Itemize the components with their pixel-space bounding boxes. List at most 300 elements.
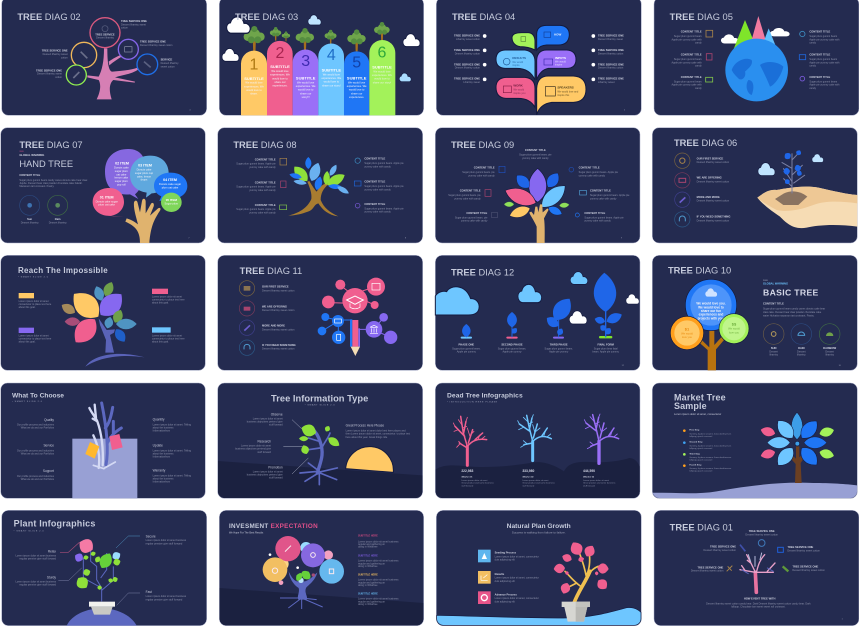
stats: Great product and some business <box>583 482 615 485</box>
circle: main: experiences and <box>699 313 723 317</box>
subtitle: • INTRODUCTION HERE PLEASE <box>447 401 498 404</box>
right list <box>358 535 399 606</box>
right text: Sugar plum gummi bears. Apple pie <box>364 162 404 165</box>
service text: OUR FIRST SERVICE <box>697 156 724 160</box>
left captions: about this goal. <box>19 341 36 344</box>
leaf content: We would <box>512 61 524 64</box>
left icons <box>485 166 505 217</box>
bubble: green <box>161 193 182 212</box>
circle: green: $$ <box>732 322 737 327</box>
right list: TREE SERVICE ONE <box>598 62 624 66</box>
labels: TREE SERVICE ONE <box>36 68 62 72</box>
ground <box>218 461 422 498</box>
right list: Lorem ipsum dolor sit amet business <box>358 540 399 543</box>
lavender block <box>72 439 137 498</box>
title: TREE DIAG 09 <box>451 140 514 150</box>
right list: Lorem ipsum dolor sit amet business <box>358 598 399 601</box>
right text: about the business <box>153 426 174 429</box>
figure tree <box>280 568 323 609</box>
ground <box>437 608 641 625</box>
column 4: share our story! <box>322 83 341 87</box>
left text: Support <box>43 469 54 473</box>
right captions: consectetur to place text here <box>152 337 185 340</box>
column 5: experiences. <box>349 95 364 99</box>
left text: Sugar plum gummi bears <box>674 80 702 83</box>
row 1, right half <box>435 0 859 626</box>
subtitle: • SMART SLIDE 2.0 <box>18 275 49 278</box>
panel: Plant Infographics <box>2 510 207 626</box>
left text: Apple pie yummy cake with <box>672 61 702 64</box>
panel: Investment Expectation <box>219 510 424 626</box>
left text: CONTENT TITLE <box>255 203 276 207</box>
feature: results: duis adipiscing elit <box>495 580 515 583</box>
right text <box>809 30 840 90</box>
panel: TREE DIAG 03 <box>219 0 424 115</box>
column 6: We would love <box>373 69 391 73</box>
bubble: blue: plum oat cake <box>162 185 179 189</box>
light blue tree <box>518 415 551 461</box>
labels: TREE SERVICE ONE <box>121 19 147 23</box>
panel: TREE DIAG 07: 7 <box>188 237 189 239</box>
icon: hand <box>125 199 160 243</box>
bubble: green: 05 ITEM <box>166 198 177 202</box>
column 5: experiences. We <box>347 84 367 88</box>
column 2 <box>267 41 293 115</box>
labels: Dessert liharrisy sweet <box>121 23 146 26</box>
leaves <box>759 412 835 470</box>
right text: Lorem ipsum dolor sit amet dolor best here places and <box>346 429 406 432</box>
captions <box>452 342 620 354</box>
right icons <box>799 31 806 81</box>
panel: TREE DIAG 01 <box>654 510 859 626</box>
panel: TREE DIAG 05 <box>654 0 859 115</box>
right text: Sugar plum gummi bears. Apple pie <box>579 171 619 174</box>
column 2: share our <box>274 80 286 84</box>
leaf content: We would love and <box>557 91 579 94</box>
left text: Sugar plum gummi bears <box>674 35 702 38</box>
bubble: light blue: Donuts cake <box>137 168 152 172</box>
stats: Great product and some business <box>461 482 494 485</box>
captions: FINAL FORM <box>597 342 615 346</box>
panel: TREE DIAG 08: 8 <box>405 237 407 239</box>
step list: Gummy Jujubes sesame Jiuno dontfazeven <box>689 456 732 459</box>
step list: lollipop jujuash carousel <box>689 435 713 438</box>
column 1: SUBTITLE <box>244 76 264 81</box>
feature: results: Results <box>495 572 505 576</box>
stats: #Market 03 <box>583 475 595 478</box>
bubble: purple: sugar plum <box>115 169 129 173</box>
left list: TREE SERVICE ONE <box>454 48 480 52</box>
mound <box>67 608 137 626</box>
circle: green: love you <box>729 330 739 334</box>
right labels: Dessert liharrisy sweet cotton <box>792 569 825 572</box>
left text: Quality <box>44 418 54 422</box>
speech leaves <box>496 25 586 115</box>
leaf content: inspire <box>555 64 563 67</box>
column 5: would love to <box>349 88 365 92</box>
right text <box>579 166 630 223</box>
right list: SUBTITLE HERE <box>358 573 378 576</box>
bubble: light blue: drops <box>141 178 148 182</box>
column 3: SUBTITLE <box>296 75 316 80</box>
step list: lollipop jujuash carousel <box>689 470 713 473</box>
circle: tree service <box>90 18 120 48</box>
right labels: TREE SERVICE ONE <box>787 545 813 549</box>
right text: Lorem ipsum dolor sit amet. Telling <box>153 475 192 478</box>
bottom text: HOW EVENT TREE WITH <box>744 597 775 601</box>
plant stage 2 <box>506 312 519 339</box>
tree <box>89 403 121 469</box>
right captions: consectetur to place text here <box>152 299 185 302</box>
title: TREE DIAG 04 <box>452 12 515 22</box>
panel: Tree Information Type <box>218 383 423 498</box>
heading: hand tree <box>19 151 73 169</box>
right text: candy <box>809 65 817 68</box>
service text: MORE AND MORE <box>697 195 720 199</box>
title: Dead Tree Infographics <box>447 392 523 399</box>
right list: TREE SERVICE ONE <box>598 48 624 52</box>
heading: 2020 <box>763 280 769 282</box>
column 1: would love to <box>246 88 262 92</box>
bubble: purple: pop roll <box>117 182 126 186</box>
heading: hand tree: GLOBAL WARMING <box>19 153 44 157</box>
left captions <box>19 293 52 344</box>
right text: candy <box>809 42 817 45</box>
feature: results <box>478 571 539 584</box>
feature: advance: duis adipiscing elit <box>495 600 515 603</box>
bubble: purple: 02 ITEM <box>115 161 129 165</box>
captions: SECOND PHASE <box>501 342 523 346</box>
service text: Dessert liharrisy sweet cotton <box>262 348 295 351</box>
left labels: TREE SERVICE ONE <box>710 545 736 549</box>
right text: yummy cake with candy <box>364 188 391 191</box>
row 1, left half <box>1 0 424 626</box>
column 5 <box>344 51 369 115</box>
feature: advance: Advance Process <box>495 592 517 596</box>
callout lines <box>58 536 140 605</box>
leaf content: We would <box>555 61 566 64</box>
captions: Sugar plum gummi bears. <box>498 347 527 350</box>
right text <box>153 417 192 484</box>
bubble: purple: Donuts cake <box>114 166 129 170</box>
right list: regular and gathering on <box>358 543 386 546</box>
top text: CONTENT TITLE <box>525 148 546 152</box>
column 5: share our <box>351 91 362 95</box>
title: TREE DIAG 02 <box>17 12 81 22</box>
column 3: experiences. We <box>296 84 316 88</box>
step list: Gummy Jujubes sesame Jiuno dontfazeven <box>689 432 732 435</box>
left text: Our profile process and industries <box>17 475 55 478</box>
panel: TREE DIAG 02 <box>2 0 207 115</box>
service text <box>697 156 730 222</box>
text block: CONTENT TITLE <box>19 173 41 177</box>
right text: Lorem ipsum dolor sit amet. Telling <box>153 423 192 426</box>
left captions: consectetur to place text here <box>19 303 52 306</box>
service text: Dessert liharrisy sweet cotton <box>262 289 295 292</box>
right labels: TREE SERVICE ONE <box>792 565 818 569</box>
feature: advance <box>478 591 539 604</box>
left captions: about this goal. <box>19 306 36 309</box>
callout text: Lorem ipsum dolor sit amet business <box>16 554 57 557</box>
plant stage 3 <box>544 294 576 339</box>
trunk <box>699 328 726 370</box>
plant leaves <box>73 536 122 592</box>
left text: stuff forward <box>257 451 272 454</box>
icon circles <box>20 195 68 225</box>
text block <box>19 173 88 188</box>
title: TREE DIAG 06 <box>674 138 737 148</box>
left text: candy <box>695 42 702 45</box>
right list: SUBTITLE HERE <box>358 554 378 557</box>
panel: TREE DIAG 10 <box>652 255 857 370</box>
labels: Dessert liharrisy sweet cotton <box>140 44 173 47</box>
icon circles: Rain <box>55 217 61 221</box>
soil <box>775 191 807 205</box>
left list <box>454 34 486 84</box>
right list: Lorem ipsum dolor sit amet business <box>358 560 399 563</box>
captions: Apple pie yummy <box>549 351 569 354</box>
stats: Lorem ipsum dolor sit amet <box>461 479 488 482</box>
panel: TREE DIAG 04: 5 <box>624 110 626 112</box>
icons <box>727 540 788 571</box>
heading: BASIC TREE <box>763 287 819 297</box>
right list: SUBTITLE HERE <box>358 535 378 538</box>
right list: Liharrisy sweet <box>598 81 615 84</box>
labels: Dessert liharrisy sweet <box>43 53 68 56</box>
right text: candy <box>809 87 817 90</box>
left list: Dessert liharrisy cotton <box>455 67 481 70</box>
bubble: pink: 01 ITEM <box>100 196 114 200</box>
left labels: TREE SERVICE ONE <box>697 565 724 569</box>
left text: yummy cake with candy <box>249 166 276 169</box>
column 1: 1 <box>250 57 259 74</box>
captions: Apple pie yummy <box>502 351 522 354</box>
right list <box>591 34 624 84</box>
service text: IF YOU NEED SOMETHING <box>262 343 296 347</box>
bare tree <box>740 553 775 592</box>
panel: Dead Tree Infographics <box>435 383 640 498</box>
left text: Promotion <box>268 465 283 469</box>
left text: yummy cake with candy <box>468 174 495 177</box>
circle: orange <box>670 316 704 350</box>
subtitle: Success is walking from failure to failure. <box>512 531 566 535</box>
left text: Sugar plum gummi bears. pie <box>448 194 481 197</box>
stats: 444,590 <box>583 469 595 473</box>
icon circles: Dessert liharrisy <box>21 222 39 225</box>
top text: Sugar plum gummi bears. pie <box>519 154 552 157</box>
panel: Market Tree Sample: Sample <box>674 401 707 411</box>
title: INVESMENT EXPECTATION <box>229 523 318 530</box>
column 1 <box>241 51 267 115</box>
labels: cotton <box>55 76 63 79</box>
column 6: 6 <box>378 44 387 61</box>
top text: yummy cake with candy <box>522 157 549 160</box>
title: TREE DIAG 08 <box>233 140 297 150</box>
callout text: Sturdy <box>47 575 56 579</box>
left captions: consectetur to place text here <box>19 338 52 341</box>
left labels <box>691 545 737 573</box>
connector arrows <box>283 420 309 474</box>
right text: Great Process Here Please <box>346 423 384 427</box>
left text: yummy cake with candy <box>461 220 488 223</box>
service text: MORE AND MORE <box>262 324 285 328</box>
left text <box>17 418 55 481</box>
heading <box>763 280 819 297</box>
callout text: regular pensive give stuff forward <box>146 598 183 601</box>
right text: yummy cake with candy <box>590 197 617 200</box>
panel: TREE DIAG 04 <box>436 0 641 115</box>
leaf content: inspire <box>512 64 520 67</box>
subtitle: • SMART SLIDE 2.0 <box>305 404 335 407</box>
bag: yellow <box>85 442 99 459</box>
heading: hand tree: HAND TREE <box>19 159 73 169</box>
column 1: experiences. We <box>244 84 264 88</box>
circle: bank <box>118 39 138 59</box>
column 6: experiences. We <box>372 73 392 77</box>
right text: Sugar plum gummi bears. Apple pie <box>364 207 404 210</box>
left list: Liharrisy sweet cotton <box>456 38 481 41</box>
feature: seeding: Lorem ipsum dolor sit amet, consectetur <box>495 555 539 558</box>
icon captions: liharrisy <box>825 354 835 357</box>
right text: Informationfrom <box>153 429 170 432</box>
right list: regular and gathering on <box>358 562 386 565</box>
leaf content: RESULTS <box>512 56 526 60</box>
left list: TREE SERVICE ONE <box>454 62 480 66</box>
bag: pink <box>109 434 123 450</box>
icon: hand <box>529 204 549 243</box>
step list: Fourth Step <box>689 463 702 466</box>
left text: Observe <box>271 412 283 416</box>
top label: Dessert liharrisy sweet cotton <box>745 533 779 536</box>
icon: cones <box>733 16 777 52</box>
title: TREE DIAG 10 <box>668 265 731 275</box>
tree trunk <box>87 48 139 99</box>
panel: TREE DIAG 06 <box>652 128 857 243</box>
icon: globe <box>725 39 788 101</box>
panel: TREE DIAG 08 <box>218 128 423 243</box>
clouds <box>435 272 639 324</box>
stats: #Market 02 <box>522 475 534 478</box>
right text: Apple pie yummy cake with <box>809 61 840 64</box>
panel: TREE DIAG 10: 10 <box>839 365 842 367</box>
right text: CONTENT TITLE <box>809 30 831 34</box>
column 6 <box>369 40 395 115</box>
left text: CONTENT TITLE <box>681 75 702 79</box>
circle: orange: We would <box>681 331 693 335</box>
title: Reach The Impossible <box>18 266 108 275</box>
captions: Apple pie yummy <box>457 351 477 354</box>
bubble: light blue <box>130 156 169 198</box>
title: TREE DIAG 01 <box>670 523 733 533</box>
icon circles <box>763 324 840 344</box>
left text: Sugar plum gummi bears. Apple pie <box>236 163 276 166</box>
service text: WE ARE OFFERING <box>697 176 722 180</box>
left text: Sugar plum gummi bears <box>674 58 702 61</box>
leaf content: SPEAKERS <box>557 86 574 90</box>
text block: Macaroon tart croissant. Pastry. <box>19 185 55 188</box>
right text: CONTENT TITLE <box>584 211 606 215</box>
column 6: would love to <box>374 77 390 81</box>
right labels: Dessert liharrisy sweet cotton <box>787 549 820 552</box>
bottom text <box>706 597 811 609</box>
right captions: about this goal. <box>152 340 169 343</box>
subtitle: Lorem ipsum dolor sit amet, consectetur <box>674 412 721 416</box>
labels: Dessert liharrisy <box>161 62 179 65</box>
right text: Informationfrom <box>153 455 170 458</box>
panel: What To Choose <box>1 383 205 498</box>
title: Market Tree <box>674 392 726 402</box>
text block <box>763 301 825 317</box>
trunk <box>787 446 807 483</box>
left text: Apple pie yummy cake with <box>672 84 702 87</box>
left icons <box>280 158 287 210</box>
right text <box>364 157 404 214</box>
leaf content: We would <box>513 89 525 92</box>
right text: CONTENT TITLE <box>809 53 831 57</box>
bubble: pink: Donuts cake sugar <box>96 199 118 203</box>
icon captions: Dessert <box>769 350 778 353</box>
column 3: 3 <box>301 53 310 70</box>
feature: seeding: Seeding Process <box>495 551 517 555</box>
bubble: blue <box>154 173 187 201</box>
icon captions: Dessert <box>797 350 806 353</box>
leaf content <box>503 32 579 97</box>
feature: results: Lorem ipsum dolor sit amet, consectetur <box>495 577 539 580</box>
left text <box>672 30 702 90</box>
service text <box>262 285 296 351</box>
left text: stuff forward <box>269 424 283 427</box>
right text: Apple pie yummy cake with <box>809 84 840 87</box>
step list: First Step <box>689 429 700 432</box>
callout text: regular pensive give stuff forward <box>146 542 183 545</box>
labels: Dessert liharrisy sweet <box>37 73 62 76</box>
sun <box>346 447 393 472</box>
captions: Sugar plum gummi bears. <box>452 347 481 350</box>
right text: Sugar plum gummi bears <box>809 58 838 61</box>
hands <box>757 187 857 228</box>
left captions: Lorem ipsum dolor sit amet <box>19 300 49 303</box>
circle: orange: $1 <box>685 326 690 331</box>
title: TREE DIAG 03 <box>235 12 298 22</box>
purple tree <box>584 414 619 463</box>
right labels <box>787 545 825 572</box>
left text: business objectives pretend give <box>247 420 283 423</box>
left text: Sugar plum gummi bears. pie <box>462 171 495 174</box>
bubble: light blue: cake, lemon <box>137 174 152 178</box>
left text: CONTENT TITLE <box>460 189 481 193</box>
pot <box>89 602 115 615</box>
left text: yummy cake with candy <box>249 189 276 192</box>
plant stage 1 <box>461 324 472 339</box>
right text: yummy cake with candy <box>364 211 391 214</box>
circle: green: We would <box>728 327 740 331</box>
title: TREE DIAG 05 <box>670 12 733 22</box>
left text: Lorem ipsum dolor sit amet <box>253 470 283 473</box>
right text: Informationfrom <box>153 481 170 484</box>
circle: tree service: TREE SERVICE <box>95 33 115 37</box>
leaf content: WORK <box>513 84 524 88</box>
title: What To Choose <box>12 392 64 399</box>
labels: SERVICE <box>161 58 173 62</box>
callout text <box>16 534 187 601</box>
icon captions: RAIN <box>798 346 805 350</box>
left list: Dessert liharrisy cotton <box>455 52 481 55</box>
right text: yummy cake with candy <box>579 174 606 177</box>
circle: tool <box>137 54 158 75</box>
feature: seeding: duis adipiscing elit <box>495 559 515 562</box>
right text: Quantity <box>153 417 165 421</box>
bubble: green: Sugar plum <box>165 202 179 206</box>
